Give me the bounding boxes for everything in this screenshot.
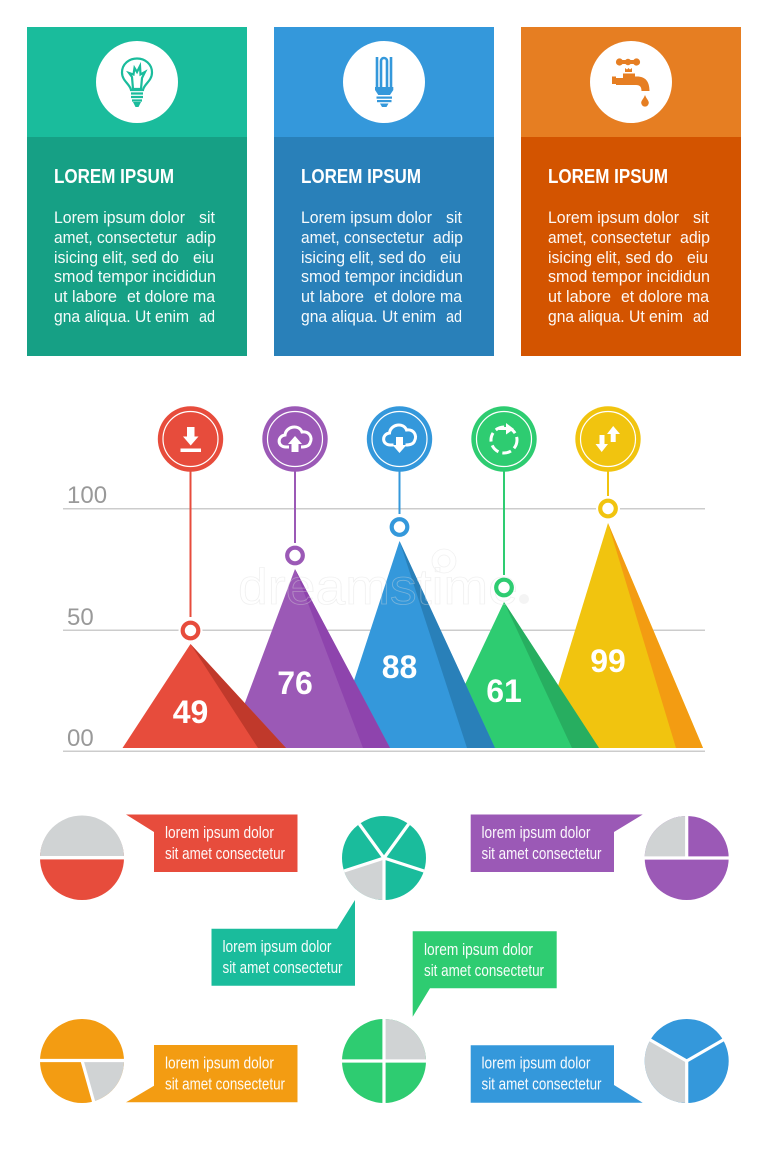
text block: teal card: sit [199, 209, 215, 227]
callout: orange [126, 1045, 298, 1102]
text block: blue card: isicing elit, sed do [301, 249, 426, 267]
text block: orange card: gna aliqua. Ut enim [548, 308, 683, 326]
text block: blue card: amet, consectetur [301, 229, 424, 247]
callout: teal: sit amet consectetur [222, 959, 343, 977]
text block: blue card: eiu [440, 249, 461, 267]
heading: orange card: LOREM IPSUM [548, 166, 668, 188]
triangle: purple 76: 76 [277, 665, 313, 701]
text block: orange card: eiu [687, 249, 708, 267]
callout: teal [212, 900, 355, 986]
callout: orange: sit amet consectetur [165, 1076, 285, 1094]
callout: red: sit amet consectetur [165, 845, 285, 863]
text block: blue card: ad [446, 308, 462, 326]
text block: teal card: et dolore ma [127, 288, 216, 306]
icon: refresh [491, 423, 517, 453]
text block: blue card: Lorem ipsum dolor [301, 209, 432, 227]
icon: cloud download [384, 425, 416, 453]
triangle: red 49 [122, 644, 286, 748]
triangle: yellow 99: 99 [590, 643, 626, 679]
chart: triangle bar chart [63, 406, 705, 752]
icon: water tap [612, 58, 650, 107]
pie: orange [39, 1019, 125, 1103]
panel: orange card [521, 27, 741, 356]
text block: orange card: adip [680, 229, 710, 247]
axis labels and grid lines: 100 [67, 482, 107, 509]
axis labels and grid lines: 50 [67, 604, 94, 631]
callout: blue: lorem ipsum dolor [482, 1054, 591, 1072]
text block: orange card: sit [693, 209, 709, 227]
text block: teal card: smod tempor incididun [54, 268, 216, 286]
text block: orange card [548, 209, 710, 326]
text block: teal card: ut labore [54, 288, 117, 306]
icon: energy saving bulb [375, 57, 393, 107]
callout: teal: lorem ipsum dolor [222, 938, 332, 956]
text block: blue card: sit [446, 209, 462, 227]
panel: teal card [27, 27, 247, 356]
callout: green: lorem ipsum dolor [424, 941, 533, 959]
text block: teal card: eiu [193, 249, 214, 267]
callout: purple: lorem ipsum dolor [482, 824, 591, 842]
panel: blue card [274, 27, 494, 356]
pie: red half [38, 816, 126, 900]
triangle: purple 76 [228, 569, 390, 748]
icon: download [180, 427, 201, 452]
callout: green [413, 931, 557, 1017]
icon: light bulb [122, 58, 152, 107]
text block: teal card: amet, consectetur [54, 229, 177, 247]
text block: teal card: isicing elit, sed do [54, 249, 179, 267]
text block: blue card: ut labore [301, 288, 364, 306]
callout: orange: lorem ipsum dolor [165, 1054, 274, 1072]
heading: teal card: LOREM IPSUM [54, 166, 174, 188]
axis labels and grid lines [63, 482, 705, 752]
icon: swap arrows [596, 426, 620, 452]
triangle: green 61: 61 [486, 673, 522, 709]
text block: blue card: smod tempor incididun [301, 268, 463, 286]
callout: red: lorem ipsum dolor [165, 824, 274, 842]
pie: teal five slices [342, 816, 426, 900]
marker: blue [367, 406, 432, 535]
marker: green [471, 406, 537, 595]
marker: purple [262, 406, 328, 563]
pie: purple three quarters [644, 815, 730, 900]
text block: teal card: gna aliqua. Ut enim [54, 308, 189, 326]
callout: purple [471, 814, 643, 872]
pie: blue thirds [645, 1019, 729, 1104]
text block: orange card: ut labore [548, 288, 611, 306]
text block: teal card [54, 209, 216, 326]
text block: orange card: Lorem ipsum dolor [548, 209, 679, 227]
callout: blue: sit amet consectetur [482, 1076, 602, 1094]
triangle: green 61 [435, 602, 599, 748]
callout: purple: sit amet consectetur [482, 845, 602, 863]
heading: blue card: LOREM IPSUM [301, 166, 421, 188]
axis labels and grid lines: 00 [67, 725, 94, 752]
text block: blue card [301, 209, 463, 326]
pie: green quarters [341, 1018, 427, 1104]
text block: blue card: adip [433, 229, 463, 247]
callout: red [126, 814, 298, 872]
triangle: blue 88: 88 [382, 649, 417, 685]
triangle: blue 88 [332, 541, 495, 748]
triangle: yellow 99 [539, 523, 703, 748]
text block: orange card: et dolore ma [621, 288, 710, 306]
callout: blue [471, 1045, 643, 1103]
watermark: dreamstime [238, 559, 518, 615]
icon: cloud upload [279, 427, 311, 452]
text block: orange card: isicing elit, sed do [548, 249, 673, 267]
text block: orange card: ad [693, 308, 709, 326]
text block: blue card: et dolore ma [374, 288, 463, 306]
marker: yellow [575, 406, 641, 520]
marker: red [158, 406, 223, 642]
callout: green: sit amet consectetur [424, 962, 544, 980]
text block: orange card: smod tempor incididun [548, 268, 710, 286]
text block: orange card: amet, consectetur [548, 229, 671, 247]
text block: blue card: gna aliqua. Ut enim [301, 308, 436, 326]
triangle: red 49: 49 [173, 694, 208, 730]
text block: teal card: ad [199, 308, 215, 326]
text block: teal card: Lorem ipsum dolor [54, 209, 185, 227]
text block: teal card: adip [186, 229, 216, 247]
